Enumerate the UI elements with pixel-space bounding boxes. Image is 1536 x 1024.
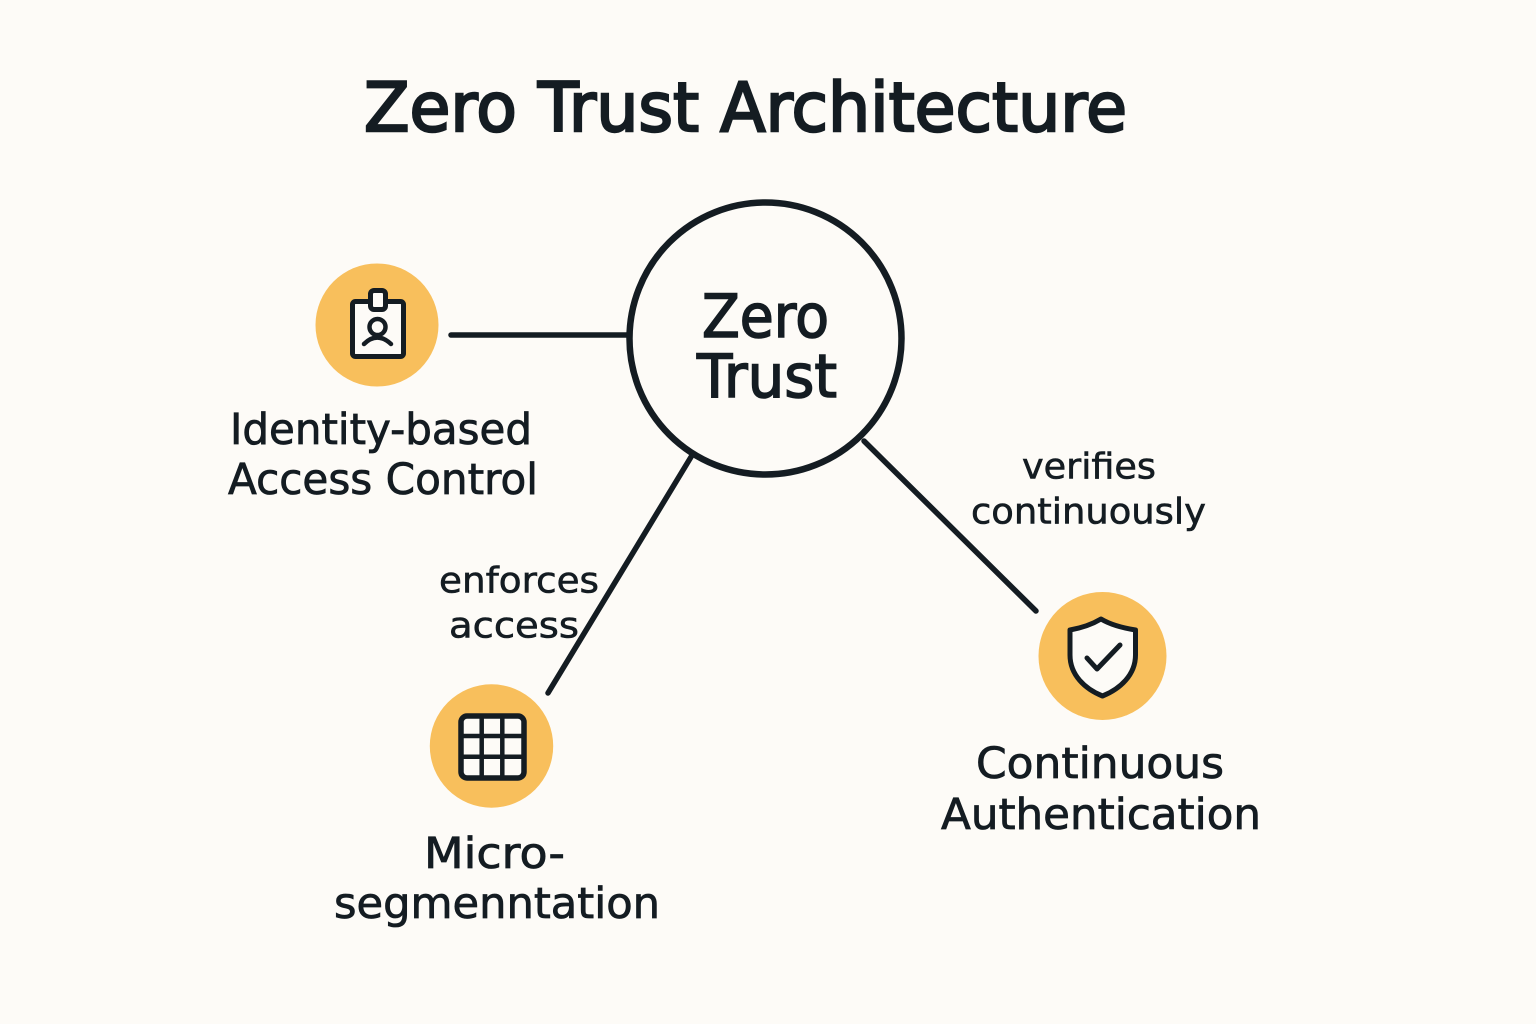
label: continuous authentication: Continuous bbox=[976, 739, 1224, 789]
central node: Zero Trust bbox=[630, 202, 902, 474]
label: verifies continuously bbox=[971, 446, 1206, 532]
label: identity-based access control: Identity-based bbox=[230, 405, 532, 455]
central node: Zero Trust: Zero bbox=[702, 282, 829, 352]
label: micro-segmentation: segmenntation bbox=[334, 879, 660, 929]
label: enforces access: access bbox=[449, 606, 579, 646]
label: enforces access bbox=[439, 560, 599, 646]
icon: identity badge bbox=[316, 264, 438, 386]
connector: identity to zero trust bbox=[451, 332, 628, 338]
connector: zero trust to micro-segmentation bbox=[548, 457, 691, 693]
label: identity-based access control bbox=[228, 405, 538, 505]
label: verifies continuously: verifies bbox=[1022, 446, 1156, 488]
label: continuous authentication bbox=[941, 739, 1261, 840]
label: enforces access: enforces bbox=[439, 560, 599, 602]
label: identity-based access control: Access Control bbox=[228, 455, 538, 505]
connector: zero trust to continuous authentication bbox=[864, 441, 1036, 611]
title: Zero Trust Architecture bbox=[364, 69, 1127, 148]
label: micro-segmentation: Micro- bbox=[424, 829, 565, 879]
label: continuous authentication: Authentication bbox=[941, 790, 1261, 840]
label: verifies continuously: continuously bbox=[971, 492, 1206, 532]
icon: shield with check bbox=[1038, 592, 1166, 720]
icon: micro-segmentation grid bbox=[430, 684, 553, 808]
central node: Zero Trust: Trust bbox=[696, 342, 837, 412]
label: micro-segmentation bbox=[334, 829, 660, 929]
